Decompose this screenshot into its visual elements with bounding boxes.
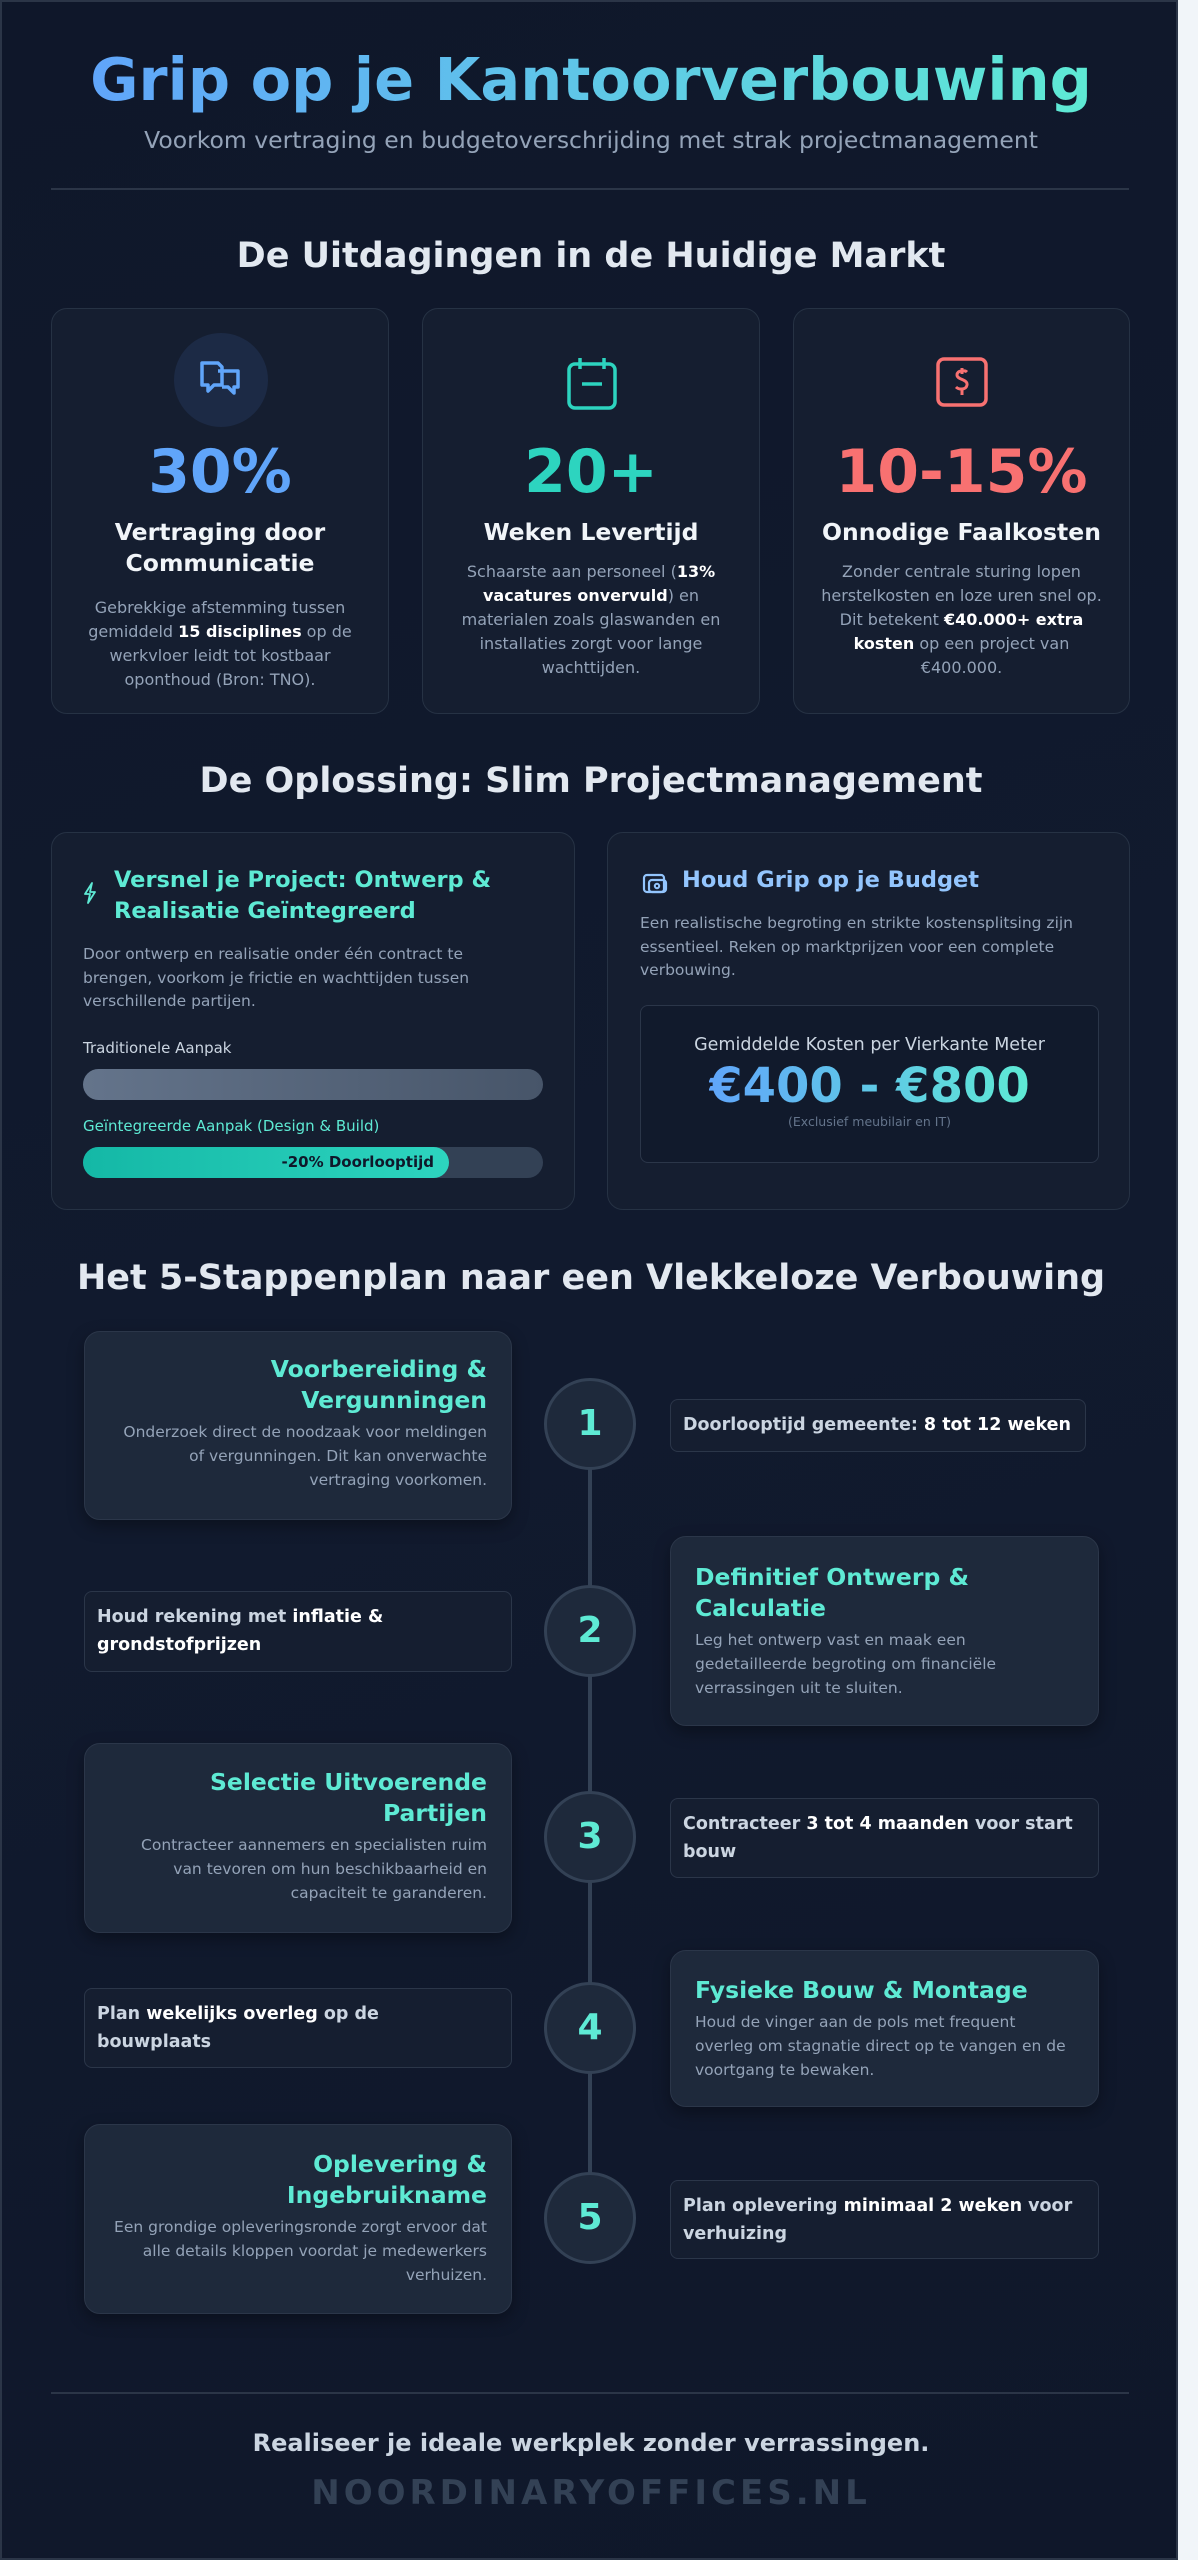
card: step 5: Een grondige opleveringsronde zorgt ervoor dat alle details kloppen voordat je medewerkers verhuizen. xyxy=(114,2218,487,2284)
circle 2: 2 xyxy=(577,1610,603,1651)
label: Weken Levertijd xyxy=(484,518,698,546)
circle 5: 5 xyxy=(577,2197,603,2238)
bar: traditional: Traditionele Aanpak xyxy=(83,1039,232,1057)
label: Onnodige Faalkosten xyxy=(822,518,1101,546)
bar: integrated: Geïntegreerde Aanpak (Design & Build) xyxy=(83,1117,379,1135)
circle 1 xyxy=(544,1378,636,1470)
step 5 xyxy=(84,2124,1099,2320)
circle 1: 1 xyxy=(577,1403,603,1444)
card: step 5: Oplevering & xyxy=(313,2150,487,2178)
circle 3: 3 xyxy=(577,1816,603,1857)
step 3 xyxy=(84,1743,1099,1938)
circle 5 xyxy=(544,2172,636,2264)
icon: chat xyxy=(174,333,268,427)
card: step 3 xyxy=(84,1743,512,1933)
icon: bolt xyxy=(84,882,96,904)
card: step 3: Contracteer aannemers en specialisten ruim van tevoren om hun beschikbaarheid en capaciteit te garanderen. xyxy=(141,1836,487,1902)
icon: wallet xyxy=(642,874,668,894)
card: step 1: Vergunningen xyxy=(301,1386,487,1414)
panel: budget xyxy=(607,832,1130,1210)
circle 4: 4 xyxy=(577,2007,603,2048)
price box xyxy=(640,1005,1099,1163)
title: Grip op je Kantoorverbouwing xyxy=(90,45,1092,114)
tip 3: Contracteer 3 tot 4 maanden voor start bouw xyxy=(683,1814,1073,1862)
panel: design & build xyxy=(51,832,575,1210)
tip 1: Doorlooptijd gemeente: 8 tot 12 weken xyxy=(683,1415,1071,1435)
tip 4 xyxy=(84,1988,512,2068)
heading: Realisatie Geïntegreerd xyxy=(114,898,416,924)
heading: challenges: De Uitdagingen in de Huidige Markt xyxy=(237,236,945,276)
circle 3 xyxy=(544,1791,636,1883)
tip 2: Houd rekening met inflatie & grondstofprijzen xyxy=(97,1607,383,1655)
icon: dollar box xyxy=(936,357,988,407)
timeline line xyxy=(588,1422,592,2222)
panel: stat 20+ xyxy=(422,308,760,714)
bar: traditional xyxy=(82,1039,543,1100)
label: Vertraging door xyxy=(115,518,325,546)
panel: stat 30% xyxy=(51,308,389,714)
price box: Gemiddelde Kosten per Vierkante Meter xyxy=(694,1035,1045,1055)
step 1 xyxy=(84,1331,1086,1526)
step 4 xyxy=(84,1950,1099,2112)
card: step 5 xyxy=(84,2124,512,2314)
heading: Versnel je Project: Ontwerp & xyxy=(114,867,491,893)
card: step 2: Leg het ontwerp vast en maak een gedetailleerde begroting om financiële verrassingen uit te sluiten. xyxy=(695,1631,996,1697)
subtitle: Voorkom vertraging en budgetoverschrijding met strak projectmanagement xyxy=(144,126,1038,154)
price box: €400 - €800 xyxy=(709,1058,1030,1114)
number: 10-15% xyxy=(835,437,1088,507)
card: step 2: Calculatie xyxy=(695,1594,826,1622)
step 2 xyxy=(84,1536,1099,1732)
circle 2 xyxy=(544,1585,636,1677)
card: step 3: Selectie Uitvoerende xyxy=(210,1768,487,1796)
description: Door ontwerp en realisatie onder één contract te brengen, voorkom je frictie en wachttijden tussen verschillende partijen. xyxy=(83,945,469,1010)
footer tagline: Realiseer je ideale werkplek zonder verrassingen. xyxy=(253,2429,929,2457)
card: step 4: Houd de vinger aan de pols met frequent overleg om stagnatie direct op te vangen en de voortgang te bewaken. xyxy=(695,2013,1066,2079)
card: step 5: Ingebruikname xyxy=(287,2181,487,2209)
tip 5: Plan oplevering minimaal 2 weken voor verhuizing xyxy=(683,2196,1072,2244)
bar: integrated xyxy=(83,1117,543,1178)
description: Zonder centrale sturing lopen herstelkosten en loze uren snel op. Dit betekent €40.000+ extra kosten op een project van €400.000. xyxy=(821,562,1102,677)
tip 4: Plan wekelijks overleg op de bouwplaats xyxy=(97,2004,379,2052)
heading: Houd Grip op je Budget xyxy=(682,867,979,893)
tip 2 xyxy=(84,1591,512,1672)
number: 30% xyxy=(148,437,292,507)
card: step 1 xyxy=(84,1331,512,1520)
card: step 3: Partijen xyxy=(383,1799,487,1827)
price box: (Exclusief meubilair en IT) xyxy=(788,1114,951,1129)
description: Schaarste aan personeel (13% vacatures onvervuld) en materialen zoals glaswanden en installaties zorgt voor lange wachttijden. xyxy=(462,562,720,677)
panel: stat 10-15% xyxy=(793,308,1130,714)
tip 5 xyxy=(670,2180,1099,2259)
card: step 4: Fysieke Bouw & Montage xyxy=(695,1976,1028,2004)
description: Gebrekkige afstemming tussen gemiddeld 15 disciplines op de werkvloer leidt tot kostbaar oponthoud (Bron: TNO). xyxy=(88,598,352,689)
card: step 1: Voorbereiding & xyxy=(271,1355,487,1383)
label: Communicatie xyxy=(126,549,314,577)
number: 20+ xyxy=(524,437,658,507)
card: step 2 xyxy=(670,1536,1099,1726)
icon: calendar xyxy=(567,358,617,410)
description: Een realistische begroting en strikte kostensplitsing zijn essentieel. Reken op marktprijzen voor een complete verbouwing. xyxy=(640,914,1073,979)
tip 3 xyxy=(670,1798,1099,1878)
tip 1 xyxy=(670,1399,1086,1452)
label xyxy=(114,518,326,577)
card: step 2: Definitief Ontwerp & xyxy=(695,1563,969,1591)
bar: integrated: -20% Doorlooptijd xyxy=(282,1153,434,1171)
heading: 5-step plan: Het 5-Stappenplan naar een Vlekkeloze Verbouwing xyxy=(77,1258,1105,1298)
heading: solution: De Oplossing: Slim Projectmanagement xyxy=(200,761,982,801)
card: step 1: Onderzoek direct de noodzaak voor meldingen of vergunningen. Dit kan onverwachte vertraging voorkomen. xyxy=(123,1423,487,1489)
card: step 4 xyxy=(670,1950,1099,2107)
footer brand: NOORDINARYOFFICES.NL xyxy=(311,2473,871,2513)
circle 4 xyxy=(544,1982,636,2074)
heading xyxy=(114,867,491,924)
